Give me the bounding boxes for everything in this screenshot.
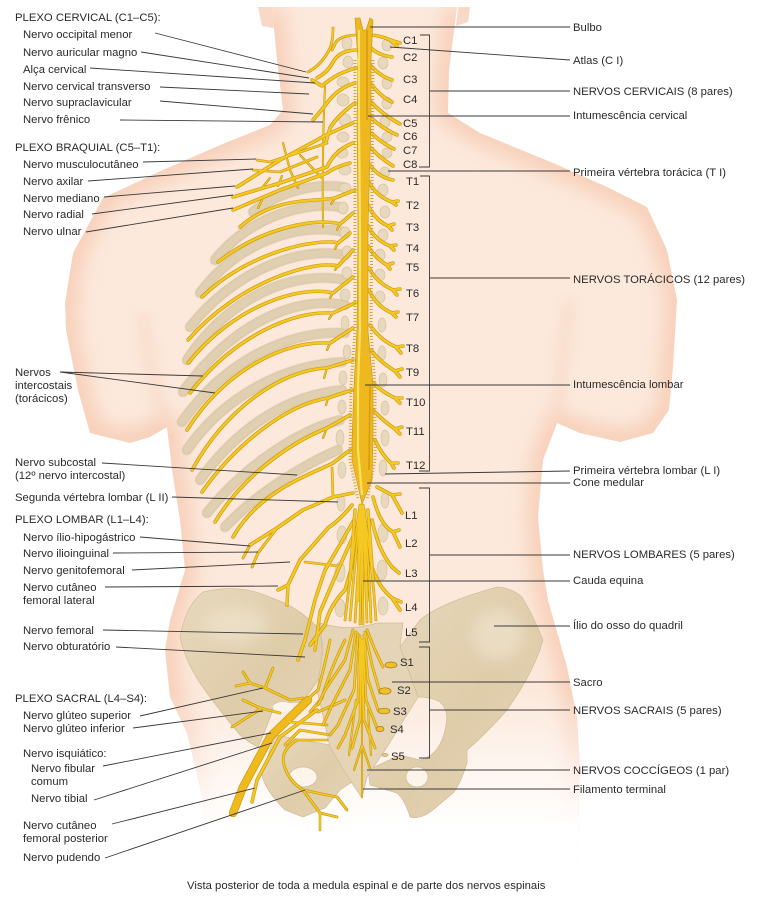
vertebral level labels: T11 (406, 426, 425, 438)
vertebral level labels: C3 (403, 74, 417, 86)
callout: pudendal nerve: Nervo pudendo (23, 852, 100, 864)
callout: radial nerve (23, 195, 233, 221)
callout: median nerve: Nervo mediano (23, 193, 100, 205)
vertebral level labels: T4 (406, 243, 419, 255)
callout: transverse cervical nerve (23, 81, 309, 94)
sacrum (317, 623, 418, 798)
callout: first lumbar vertebra (385, 465, 720, 477)
callout: common fibular nerve (31, 733, 271, 788)
vertebral level labels: L1 (405, 510, 418, 522)
callout: subcostal nerve: Nervo subcostal (15, 457, 96, 469)
left ilium (180, 589, 322, 747)
callout: tibial nerve (31, 743, 272, 805)
vertebral level labels: T5 (406, 262, 419, 274)
callout: cervical enlargement: Intumescência cervical (573, 110, 687, 122)
callout: radial nerve: Nervo radial (23, 209, 84, 221)
vertebral level labels: S2 (397, 685, 411, 697)
callout: ulnar nerve (23, 208, 233, 238)
callout: ansa cervicalis: Alça cervical (23, 64, 86, 76)
callout: musculocutaneous nerve (23, 159, 256, 171)
callout: conus medullaris: Cone medular (573, 477, 644, 489)
callout: second lumbar vertebra (15, 492, 338, 504)
callout: medulla oblongata: Bulbo (573, 22, 602, 34)
callout: coccygeal nerves: NERVOS COCCÍGEOS (1 par) (573, 764, 729, 777)
callout: transverse cervical nerve: Nervo cervical transverso (23, 81, 150, 93)
vertebral level labels: C2 (403, 52, 417, 64)
callout: atlas (390, 47, 623, 67)
cervical plexus (308, 28, 357, 227)
right ilium highlight (472, 609, 524, 661)
callout: femoral nerve: Nervo femoral (23, 625, 94, 637)
callout: subcostal nerve (15, 457, 297, 482)
left ilium highlight (203, 607, 267, 643)
callout: filum terminale: Filamento terminal (573, 784, 666, 796)
brachial plexus (233, 123, 353, 210)
vertebral level labels: C5 (403, 118, 417, 130)
vertebral level labels: S1 (400, 657, 414, 669)
callout: supraclavicular nerve: Nervo supraclavicular (23, 97, 132, 109)
right spinal nerves (368, 35, 403, 610)
callout: lateral femoral cutaneous nerve: femoral lateral (23, 595, 95, 607)
callout: subcostal nerve: (12º nervo intercostal) (15, 470, 125, 482)
callout: posterior femoral cutaneous nerve (23, 788, 255, 845)
spinal cord (350, 18, 375, 504)
callout: intercostal nerves: (torácicos) (15, 393, 68, 405)
vertebral level labels: C1 (403, 35, 417, 47)
callout: iliohypogastric nerve: Nervo ílio-hipogástrico (23, 532, 135, 544)
vertebral level labels: T12 (406, 460, 425, 472)
callout: genitofemoral nerve (23, 562, 290, 577)
pelvis and hip bones (180, 587, 543, 818)
callout: superior gluteal nerve (23, 688, 263, 722)
callout: iliohypogastric nerve (23, 532, 250, 546)
callout: ulnar nerve: Nervo ulnar (23, 226, 82, 238)
caption: Vista posterior de toda a medula espinal e de parte dos nervos espinais (187, 880, 546, 892)
callout: cervical nerves: NERVOS CERVICAIS (8 pares) (573, 86, 733, 98)
callout: great auricular nerve: Nervo auricular magno (23, 47, 137, 59)
callout: second lumbar vertebra: Segunda vértebra lombar (L II) (15, 492, 169, 504)
vertebral level labels: T2 (406, 200, 419, 212)
callout: tibial nerve: Nervo tibial (31, 793, 88, 805)
callout: first lumbar vertebra: Primeira vértebra lombar (L I) (573, 465, 720, 477)
callout: common fibular nerve: comum (31, 776, 68, 788)
vertebral level labels: C4 (403, 94, 417, 106)
callout: ilium: Ílio do osso do quadril (573, 619, 683, 632)
callout: axillary nerve: Nervo axilar (23, 176, 84, 188)
right vertebrae (375, 39, 392, 615)
callout: lesser occipital nerve: Nervo occipital menor (23, 29, 132, 41)
intercostal nerves (187, 190, 355, 537)
vertebral level labels: C7 (403, 145, 417, 157)
callout: ilioinguinal nerve: Nervo ilioinguinal (23, 548, 109, 560)
callout: intercostal nerves: intercostais (15, 380, 72, 392)
callout: ansa cervicalis (23, 64, 315, 83)
heading: lumbar plexus: PLEXO LOMBAR (L1–L4): (15, 514, 149, 526)
vertebral level labels: T7 (406, 312, 419, 324)
callout: sacral nerves: NERVOS SACRAIS (5 pares) (573, 705, 722, 717)
callout: sacrum: Sacro (573, 677, 603, 689)
left spinal nerves and plexuses (187, 28, 358, 830)
callout: superior gluteal nerve: Nervo glúteo superior (23, 710, 131, 722)
sacral foramina nerve ends S1 to S5 (376, 662, 397, 756)
callout: inferior gluteal nerve: Nervo glúteo inferior (23, 723, 125, 735)
heading: cervical plexus: PLEXO CERVICAL (C1–C5): (15, 12, 161, 24)
callout: posterior femoral cutaneous nerve: Nervo cutâneo (23, 820, 96, 832)
vertebral level labels: T1 (406, 176, 419, 188)
vertebral level labels: T3 (406, 222, 419, 234)
vertebral level labels: T10 (406, 397, 425, 409)
vertebral level labels: T9 (406, 367, 419, 379)
vertebral level labels: S4 (390, 724, 404, 736)
callout: lateral femoral cutaneous nerve: Nervo cutâneo (23, 582, 96, 594)
left ischium (262, 735, 355, 817)
heading: brachial plexus: PLEXO BRAQUIAL (C5–T1): (15, 142, 160, 154)
left vertebrae (335, 36, 353, 617)
callout: common fibular nerve: Nervo fibular (31, 763, 95, 775)
right obturator foramen (406, 767, 428, 787)
vertebral level labels: L5 (405, 627, 418, 639)
callout: pudendal nerve (23, 790, 305, 864)
callout: median nerve (23, 186, 235, 205)
callout: lumbar nerves: NERVOS LOMBARES (5 pares) (573, 549, 735, 561)
back torso silhouette (65, 7, 677, 867)
callout: posterior femoral cutaneous nerve: femoral posterior (23, 833, 108, 845)
callout: musculocutaneous nerve: Nervo musculocutâneo (23, 159, 139, 171)
callout: axillary nerve (23, 169, 253, 188)
callout: obturator nerve: Nervo obturatório (23, 641, 110, 653)
vertebrae (335, 36, 392, 617)
ribs (182, 186, 345, 527)
left obturator foramen (289, 767, 317, 787)
vertebral level labels: T6 (406, 288, 419, 300)
right ilium (368, 587, 543, 818)
callout: obturator nerve (23, 641, 305, 657)
callout: thoracic nerves: NERVOS TORÁCICOS (12 pares) (573, 273, 745, 286)
vertebral level labels: C8 (403, 159, 417, 171)
left sciatic notch (273, 702, 293, 712)
section brackets (419, 35, 430, 758)
vertebral level labels: S5 (391, 751, 405, 763)
sacral plexus and sciatic nerve (232, 640, 347, 830)
vertebral level labels: L3 (405, 568, 418, 580)
callout: great auricular nerve (23, 47, 309, 78)
callout: lumbar enlargement: Intumescência lombar (573, 379, 684, 391)
callout: intercostal nerves (15, 367, 215, 405)
left callouts (15, 12, 338, 864)
callout: lateral femoral cutaneous nerve (23, 582, 278, 607)
callout: supraclavicular nerve (23, 97, 313, 114)
vertebral level labels: T8 (406, 343, 419, 355)
callout: cauda equina: Cauda equina (573, 575, 644, 587)
vertebral level labels: C6 (403, 131, 417, 143)
vertebral level labels: L2 (405, 538, 418, 550)
cauda equina and sacral nerves (318, 505, 383, 797)
vertebral level labels: L4 (405, 602, 418, 614)
lumbar plexus (243, 468, 358, 660)
callout: lesser occipital nerve (23, 29, 306, 72)
callout: inferior gluteal nerve (23, 711, 263, 735)
heading: sciatic nerve: Nervo isquiático: (23, 748, 107, 760)
heading: sacral plexus: PLEXO SACRAL (L4–S4): (15, 693, 147, 705)
vertebral level labels: S3 (393, 706, 407, 718)
callout: phrenic nerve: Nervo frênico (23, 114, 90, 126)
vertebral level labels (390, 35, 425, 763)
callout: femoral nerve (23, 625, 303, 637)
right callouts (363, 22, 745, 796)
callout: atlas: Atlas (C I) (573, 55, 623, 67)
callout: first thoracic vertebra: Primeira vértebra torácica (T I) (573, 167, 726, 179)
callout: genitofemoral nerve: Nervo genitofemoral (23, 565, 125, 577)
callout: intercostal nerves: Nervos (15, 367, 51, 379)
